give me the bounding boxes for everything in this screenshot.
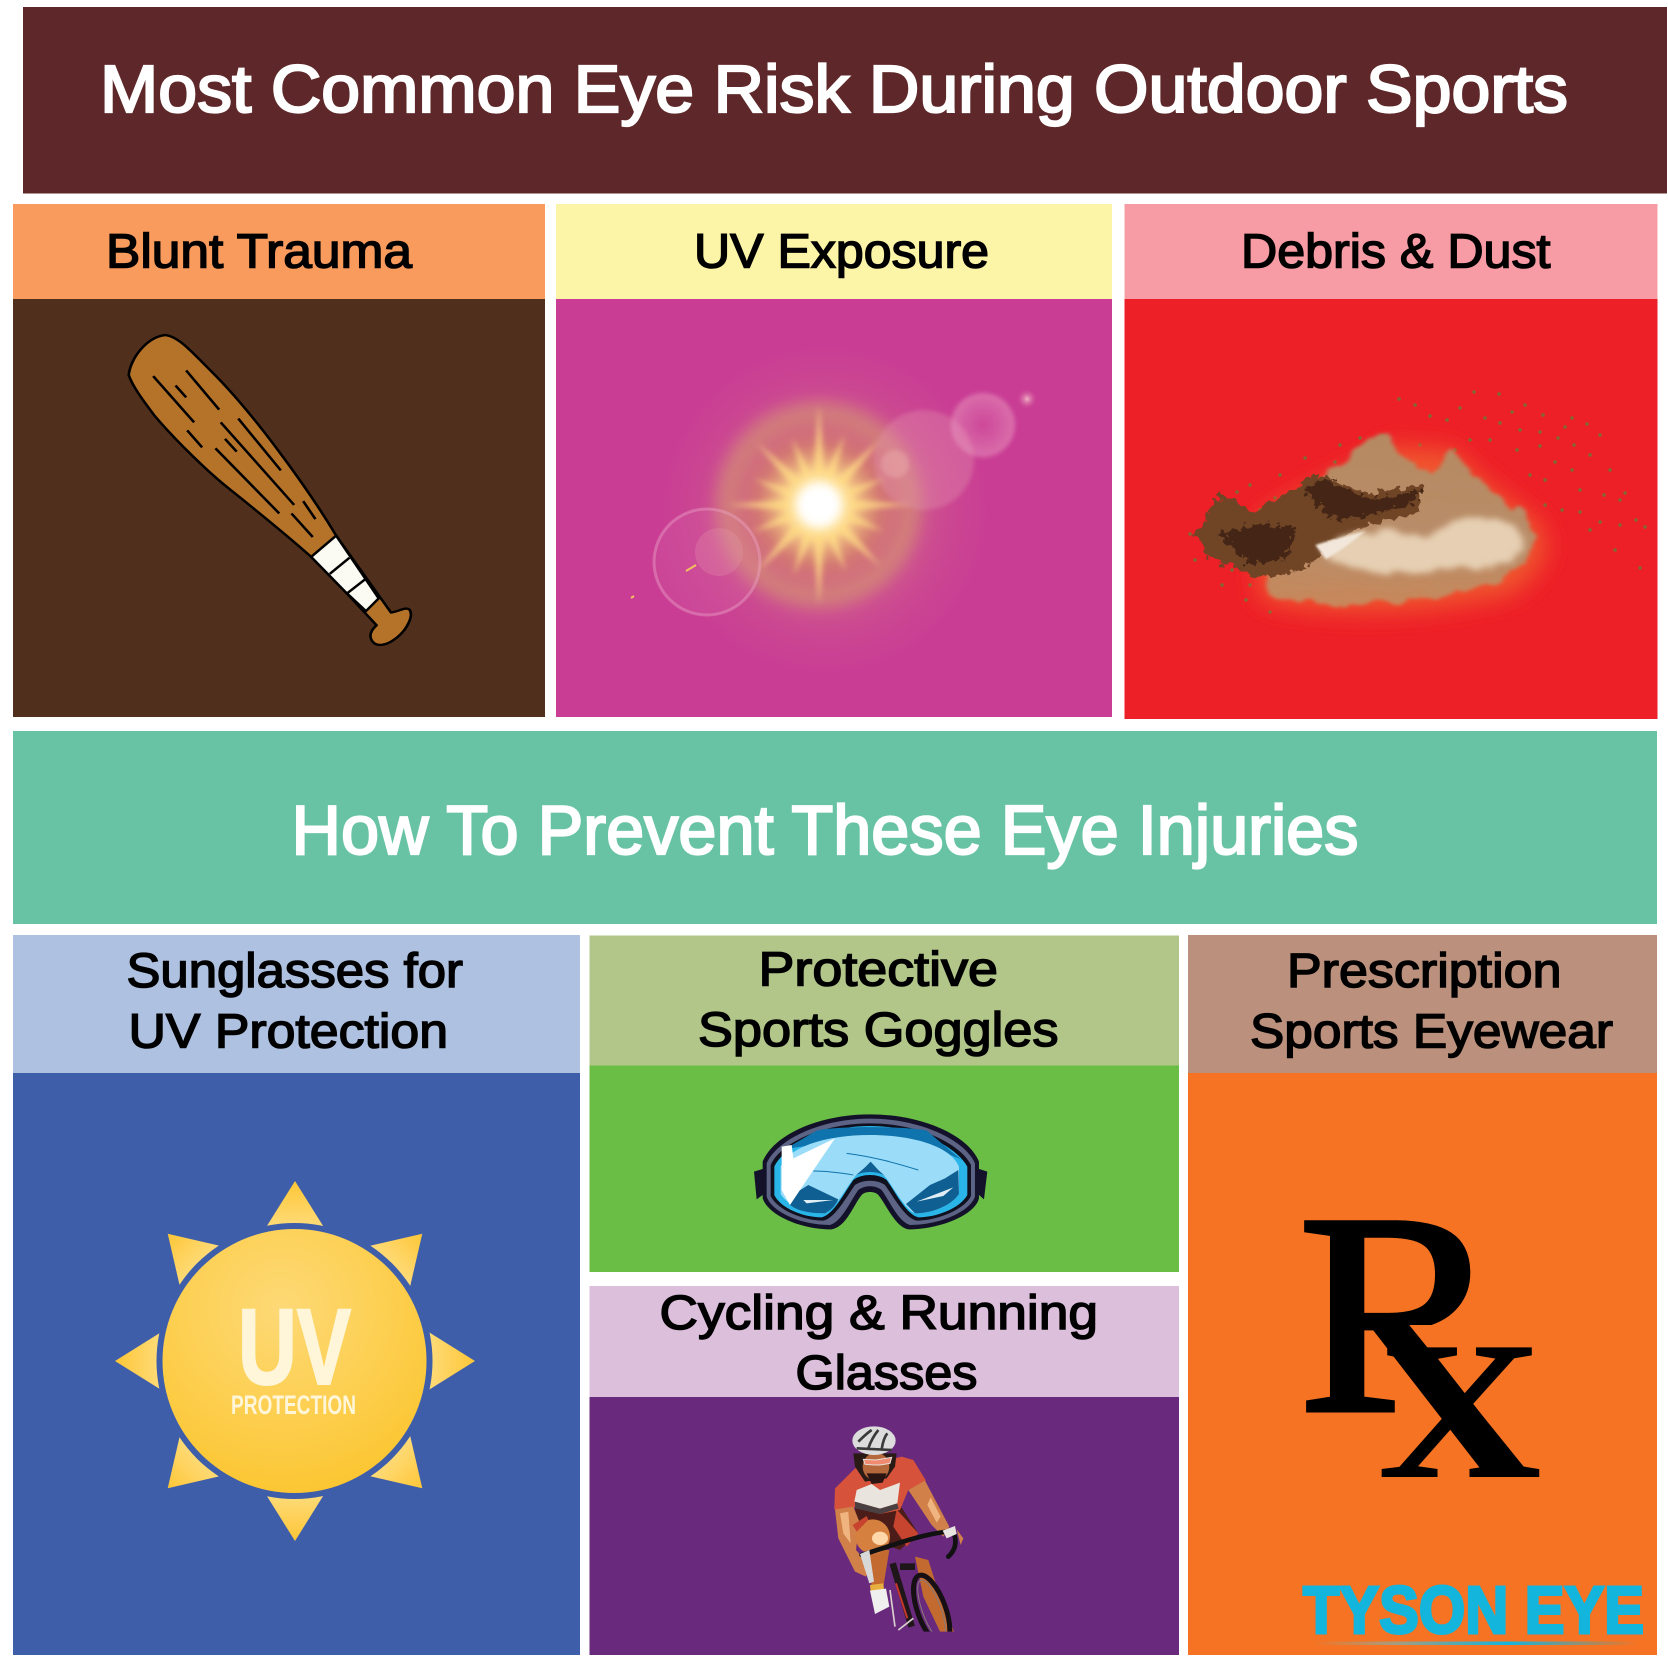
icon: UV protection sun: PROTECTION	[231, 1390, 356, 1420]
panel body: goggles	[590, 1066, 1179, 1272]
banner: how to prevent	[13, 731, 1657, 924]
icon: UV protection sun: UV	[238, 1286, 351, 1407]
panel: protective sports goggles	[590, 936, 1179, 1272]
heading: goggles	[590, 936, 1179, 1066]
panel body: prescription	[1188, 1073, 1657, 1655]
panel body: UV exposure	[556, 299, 1112, 717]
heading: prescription: Sports Eyewear	[1250, 1006, 1613, 1058]
panel body: blunt trauma	[13, 299, 545, 717]
heading: prescription: Prescription	[1287, 945, 1562, 998]
heading: blunt trauma: Blunt Trauma	[106, 226, 412, 278]
title banner: Most Common Eye Risk During Outdoor Sports	[100, 52, 1568, 127]
panel: cycling and running glasses	[590, 1286, 1179, 1655]
icon: sun lens flare	[631, 325, 1038, 695]
panel: sunglasses for UV protection	[13, 935, 580, 1655]
panel: prescription sports eyewear	[1188, 935, 1657, 1655]
icon: UV protection sun	[115, 1181, 475, 1541]
heading: UV exposure: UV Exposure	[694, 226, 989, 278]
heading: goggles: Protective	[758, 944, 998, 996]
panel: debris and dust	[1124, 204, 1658, 719]
icon: cyclist	[834, 1426, 963, 1649]
heading: cycling	[590, 1286, 1179, 1400]
heading: debris and dust	[1124, 204, 1658, 299]
icon: dust burst	[1190, 392, 1645, 613]
icon: Rx symbol	[1298, 1155, 1542, 1537]
icon: baseball bat	[129, 335, 411, 645]
panel body: debris and dust	[1124, 299, 1658, 719]
heading: sunglasses: UV Protection	[128, 1006, 448, 1058]
heading: cycling: Cycling & Running	[660, 1287, 1098, 1340]
panel body: cycling	[590, 1397, 1179, 1655]
heading: debris and dust: Debris & Dust	[1241, 226, 1550, 278]
banner: how to prevent: How To Prevent These Eye Injuries	[292, 791, 1358, 869]
title banner	[23, 7, 1667, 194]
heading: UV exposure	[556, 204, 1112, 299]
icon: Rx symbol: R	[1298, 1155, 1504, 1472]
panel body: sunglasses	[13, 1073, 580, 1655]
heading: goggles: Sports Goggles	[698, 1004, 1058, 1057]
heading: sunglasses	[13, 935, 580, 1073]
icon: sports goggles	[754, 1114, 987, 1229]
icon: Rx symbol: x	[1380, 1229, 1542, 1537]
heading: cycling: Glasses	[796, 1347, 978, 1400]
heading: blunt trauma	[13, 204, 545, 299]
heading: prescription	[1188, 935, 1657, 1073]
heading: sunglasses: Sunglasses for	[126, 945, 463, 998]
panel: blunt trauma	[13, 204, 545, 717]
panel: UV exposure	[556, 204, 1112, 717]
